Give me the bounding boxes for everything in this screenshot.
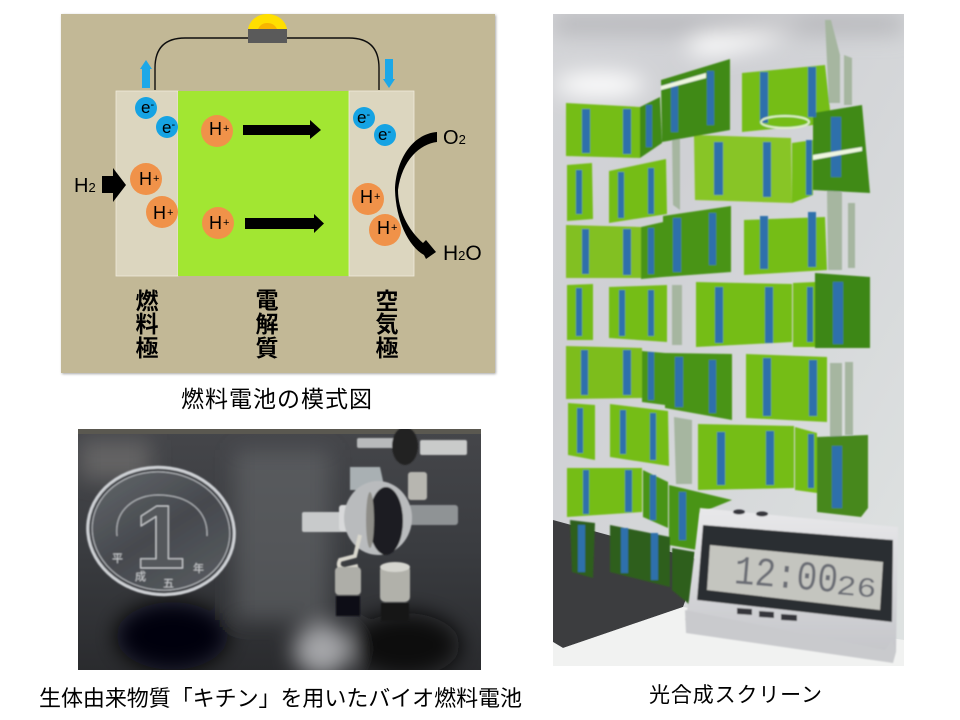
- label: air electrode: 空: [376, 288, 398, 314]
- arrow: electron flow down: [383, 59, 395, 88]
- black electrode: [369, 487, 403, 555]
- air electrode: [349, 91, 414, 276]
- electrons: air electrode: e: [357, 108, 366, 127]
- protons: electrolyte: +: [223, 217, 229, 229]
- electrons: fuel electrode: -: [171, 119, 175, 131]
- protons: electrolyte: [201, 115, 234, 239]
- icon: lamp: [248, 14, 287, 43]
- label: fuel electrode: [136, 288, 158, 361]
- label: electrolyte: 電: [256, 287, 278, 313]
- photo background: wall: [553, 14, 904, 666]
- hanging strips: [672, 20, 855, 484]
- arrow: oxygen to water: [395, 132, 437, 259]
- electrons: air electrode: -: [387, 126, 391, 138]
- silver plate: [350, 467, 385, 490]
- table: [553, 607, 904, 666]
- grid of green panels: [566, 20, 870, 605]
- light reflections: [661, 73, 862, 160]
- protons: air electrode: H: [377, 218, 390, 238]
- arrow: proton flow lower: [245, 214, 324, 233]
- protons: fuel electrode: H: [139, 169, 152, 189]
- floor mat: [553, 520, 700, 648]
- caption: fuel cell schematic: 燃料電池の模式図: [181, 386, 372, 412]
- icon: one-yen coin: [85, 464, 237, 598]
- clock LCD: [707, 545, 883, 610]
- arrow: hydrogen in: [102, 168, 126, 202]
- arrow: proton flow upper: [243, 120, 321, 139]
- clock time: 12:00: [732, 550, 840, 605]
- photo: photosynthetic screen: [553, 7, 904, 666]
- electrons: air electrode: e: [378, 125, 387, 144]
- wire: [155, 38, 379, 90]
- rows 5 to 7: [566, 346, 827, 517]
- protons: electrolyte: +: [223, 123, 229, 135]
- label: electrolyte: 質: [256, 335, 278, 361]
- electrons: fuel electrode: e: [162, 118, 171, 137]
- label: H2: H2: [74, 175, 96, 197]
- protons: electrolyte: H: [209, 213, 222, 233]
- clock face: [697, 525, 893, 622]
- icon: digital clock: [685, 508, 898, 663]
- label: electrolyte: [256, 287, 278, 361]
- label: fuel electrode: 極: [136, 335, 158, 361]
- clock time: [736, 556, 875, 598]
- photo: bio fuel cell with coin: [78, 427, 481, 677]
- protons: air electrode: [352, 183, 401, 246]
- tubes: [408, 505, 458, 525]
- protons: fuel electrode: +: [167, 207, 173, 219]
- row 8: [570, 520, 695, 605]
- clock body: [685, 508, 898, 652]
- electrons: air electrode: [353, 107, 396, 146]
- label: air electrode: 極: [376, 335, 398, 361]
- label: air electrode: 気: [376, 311, 398, 337]
- label: air electrode: [376, 288, 398, 361]
- panel: fuel cell schematic: [61, 14, 495, 373]
- row 1: [566, 65, 830, 203]
- icon: one-yen coin: 平: [112, 553, 123, 565]
- protons: fuel electrode: H: [153, 203, 166, 223]
- lead wires: [339, 535, 360, 569]
- label: H2O: H2O: [443, 242, 482, 265]
- protons: air electrode: +: [374, 191, 380, 203]
- label: fuel electrode: 料: [136, 311, 158, 337]
- electrolyte: [178, 91, 349, 276]
- electrons: fuel electrode: [135, 97, 178, 138]
- protons: air electrode: H: [360, 187, 373, 207]
- icon: one-yen coin: 成: [135, 570, 146, 583]
- arrow: electron flow up: [140, 60, 152, 88]
- protons: electrolyte: H: [209, 119, 222, 139]
- icon: one-yen coin: 年: [193, 561, 204, 575]
- electrons: fuel electrode: -: [150, 99, 154, 111]
- feet: [335, 567, 361, 595]
- label: O2: O2: [443, 127, 466, 149]
- photo background: dark table: [78, 429, 481, 670]
- electrons: fuel electrode: e: [141, 98, 150, 117]
- clock time: 26: [835, 572, 878, 607]
- icon: bio fuel cell device: [302, 427, 467, 621]
- protons: air electrode: +: [391, 222, 397, 234]
- schematic background: [61, 14, 495, 373]
- blue strips: [576, 67, 843, 580]
- caption: photosynthetic screen: 光合成スクリーン: [649, 684, 822, 707]
- electrons: air electrode: -: [366, 109, 370, 121]
- icon: one-yen coin: 1: [135, 488, 185, 588]
- icon: one-yen coin: 五: [163, 578, 174, 590]
- caption: bio fuel cell: 生体由来物質「キチン」を用いたバイオ燃料電池: [39, 686, 522, 711]
- label: fuel electrode: 燃: [136, 288, 158, 314]
- buttons: [733, 510, 797, 621]
- protons: fuel electrode: [130, 163, 178, 228]
- rows 2 to 4: [566, 159, 827, 347]
- label: electrolyte: 解: [256, 311, 278, 337]
- rear device: [357, 438, 397, 448]
- fuel electrode: [116, 91, 178, 276]
- protons: fuel electrode: +: [153, 173, 159, 185]
